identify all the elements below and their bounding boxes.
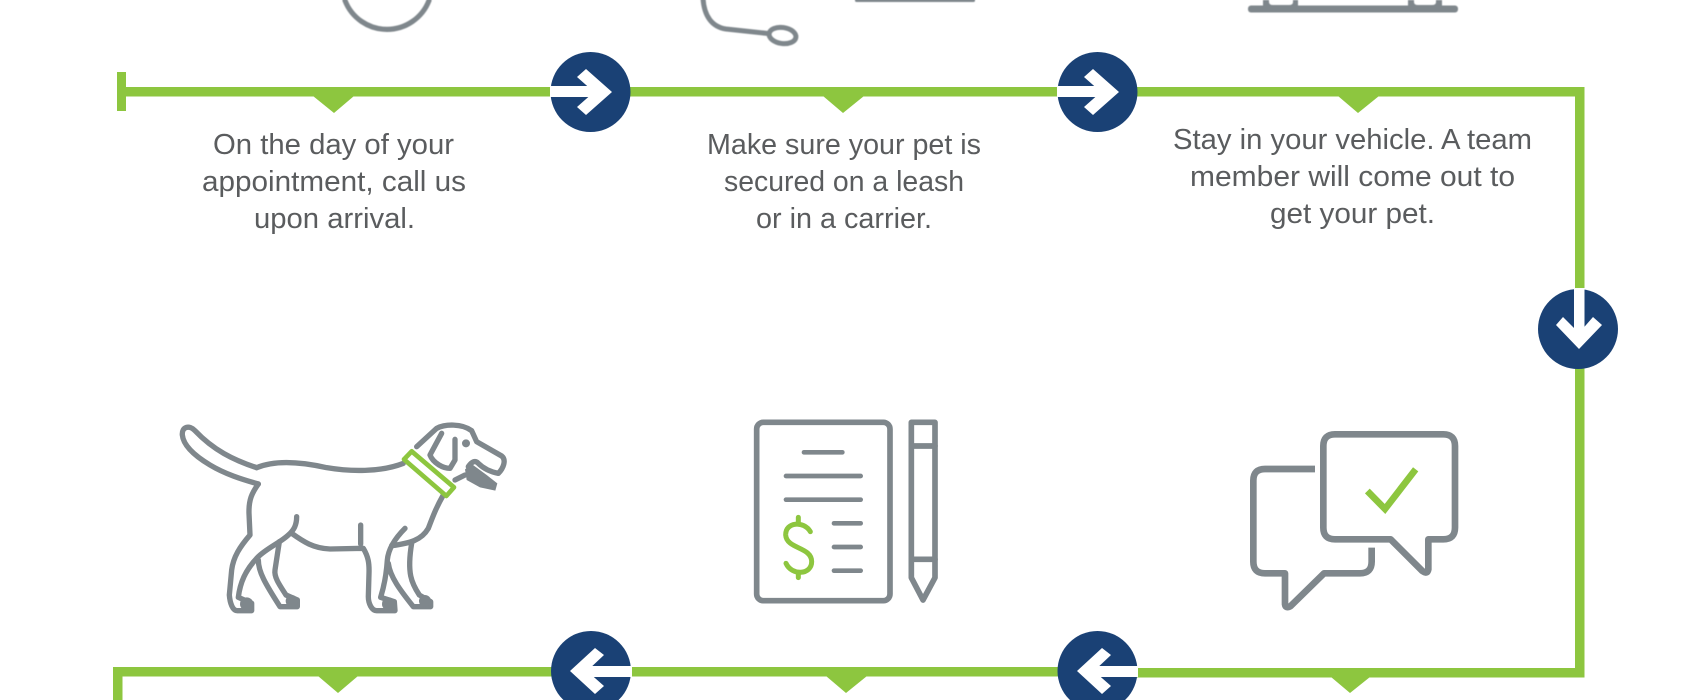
dollar sign bbox=[786, 517, 812, 578]
icon: dog with green collar bbox=[182, 425, 504, 611]
arrow: down bbox=[1538, 288, 1618, 369]
text: step 2: Make sure your pet is bbox=[707, 129, 981, 161]
timeline path bbox=[113, 72, 1584, 700]
text: step 2: secured on a leash bbox=[724, 166, 964, 198]
icon: phone or clock circle cropped at top bbox=[345, 0, 429, 29]
text: step 1: appointment, call us bbox=[202, 166, 466, 198]
text: step 3: get your pet. bbox=[1270, 198, 1435, 230]
arrow: left, right-hand bbox=[1058, 631, 1138, 700]
text: step 2 bbox=[707, 129, 981, 235]
text: step 1: upon arrival. bbox=[254, 203, 415, 235]
arrow: right, second bbox=[1057, 52, 1138, 132]
text: step 1: On the day of your bbox=[213, 129, 455, 161]
icon: invoice with dollar sign and pencil bbox=[757, 422, 935, 601]
icon: leash and carrier cropped at top bbox=[703, 0, 975, 45]
pencil bbox=[911, 422, 935, 600]
arrow: left, left-hand bbox=[551, 631, 632, 700]
text: step 3: Stay in your vehicle. A team bbox=[1173, 124, 1532, 156]
arrow: right, first bbox=[550, 52, 630, 132]
text: step 1 bbox=[202, 129, 466, 235]
text: step 2: or in a carrier. bbox=[756, 203, 932, 235]
icon: vehicle base cropped at top bbox=[1248, 0, 1458, 12]
icon: chat bubbles with check mark bbox=[1253, 434, 1455, 607]
dog mouth and paws bbox=[240, 464, 497, 611]
text: step 3: member will come out to bbox=[1190, 161, 1515, 193]
text: step 3 bbox=[1173, 124, 1532, 230]
